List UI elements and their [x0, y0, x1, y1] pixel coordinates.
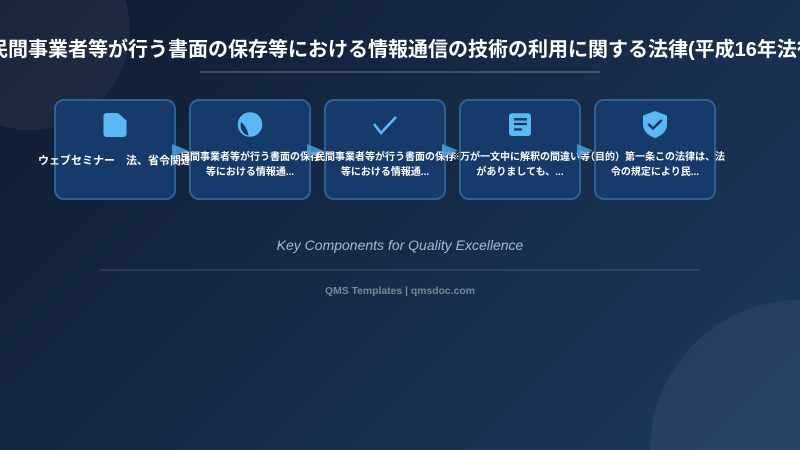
- card 2 text: 等における情報通...: [206, 167, 294, 178]
- card 2: [189, 99, 311, 200]
- card 4 text: [450, 150, 590, 178]
- card 3 text: 等における情報通...: [341, 167, 429, 178]
- card 5 text: （目的）第一条この法律は、法: [585, 152, 725, 163]
- decorative circle: bottom right: [650, 300, 800, 450]
- card 2 text: [180, 150, 320, 178]
- card 4 text: がありましても、...: [476, 167, 564, 178]
- card 4: [459, 99, 581, 200]
- arrow 2: [307, 144, 323, 157]
- card 4 text: ※万が一文中に解釈の間違い等: [450, 152, 590, 163]
- card 5 text: 令の規定により民...: [611, 167, 699, 178]
- card 1 text: ウェブセミナー 法、省令関連: [38, 154, 192, 166]
- card 3 text: 民間事業者等が行う書面の保存: [315, 152, 455, 163]
- card 5 text: [585, 151, 725, 178]
- icon: circle with leaf: [238, 112, 262, 137]
- icon: shield check: [643, 111, 667, 138]
- card 1: [54, 99, 176, 200]
- subtitle: Key Components for Quality Excellence: [277, 237, 523, 253]
- arrow 1: [172, 144, 188, 157]
- card 5: [594, 99, 716, 200]
- title underline: [200, 71, 600, 73]
- decorative circle: top left: [0, 0, 130, 130]
- arrow 4: [577, 144, 593, 157]
- card 3 text: [315, 150, 455, 178]
- card 3: [324, 99, 446, 200]
- card 2 text: 民間事業者等が行う書面の保存: [180, 152, 320, 163]
- arrow 3: [442, 144, 458, 157]
- icon: check mark: [373, 116, 397, 135]
- footer: QMS Templates | qmsdoc.com: [325, 286, 475, 297]
- footer divider: [100, 269, 700, 271]
- icon: article: [509, 113, 531, 136]
- icon: document: [104, 113, 126, 137]
